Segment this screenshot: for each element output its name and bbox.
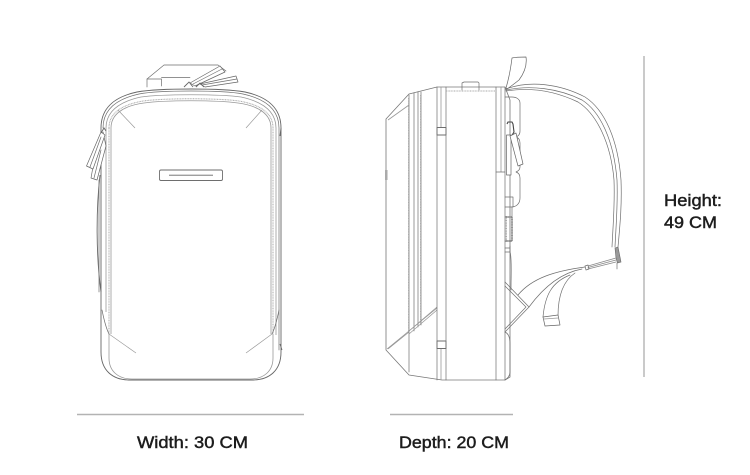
shoulder strap bbox=[506, 84, 621, 247]
corner fold lines bbox=[109, 110, 272, 353]
width label: Width: 30 CM bbox=[137, 434, 248, 452]
strap buckle bbox=[615, 247, 621, 263]
top handle bbox=[147, 65, 226, 87]
height value: 49 CM bbox=[664, 214, 717, 232]
front label patch bbox=[160, 170, 222, 180]
side view backpack bbox=[385, 57, 621, 380]
zipper band outlines bbox=[103, 91, 279, 350]
side zipper pull bbox=[506, 122, 523, 175]
width dimension line bbox=[77, 414, 304, 416]
height dimension line bbox=[643, 56, 645, 377]
central frame columns bbox=[437, 87, 505, 380]
top tab and seam bbox=[462, 82, 479, 90]
back padding bbox=[505, 97, 520, 380]
side zipper pulls bbox=[86, 128, 106, 180]
top zipper pulls bbox=[184, 66, 238, 87]
height label: Height: bbox=[664, 192, 722, 210]
front view backpack bbox=[86, 65, 282, 380]
frame clips bbox=[437, 128, 446, 135]
front shell facets bbox=[385, 92, 437, 372]
depth dimension line bbox=[390, 414, 513, 416]
side strap edge bbox=[97, 175, 101, 292]
depth label: Depth: 20 CM bbox=[399, 434, 509, 452]
lower webbing bbox=[518, 258, 616, 326]
lower wedge bbox=[505, 282, 529, 332]
backpack outer body bbox=[101, 89, 281, 380]
lower corner panel bbox=[109, 334, 273, 379]
top grab loop bbox=[506, 57, 526, 89]
main side body outline bbox=[386, 87, 510, 380]
